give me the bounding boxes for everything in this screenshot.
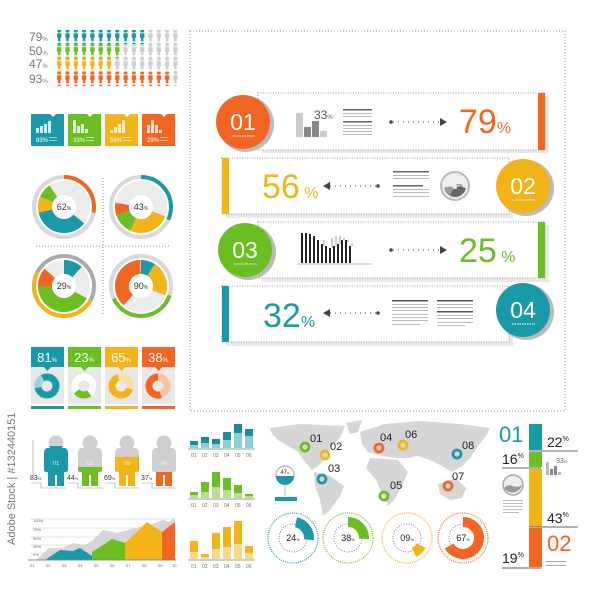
bar chart green: 05 (235, 503, 241, 509)
bar chart yellow: 03 (213, 564, 219, 570)
bar chart green: 03 (213, 503, 219, 509)
world map: 01 (310, 433, 322, 445)
area chart: 09 (158, 563, 163, 568)
figures chart: 69% (104, 475, 116, 482)
figures chart (30, 436, 177, 488)
donut chart 90% (111, 256, 171, 316)
right column stacked bar: 01 (499, 422, 523, 447)
world map (270, 420, 490, 516)
bar chart teal: 03 (213, 453, 219, 459)
area chart (28, 518, 177, 568)
bar chart yellow: 04 (224, 564, 230, 570)
bar chart green: 01 (191, 503, 197, 509)
bar chart teal: 05 (235, 453, 241, 459)
donut chart 29%: 29% (57, 281, 72, 291)
world map: 05 (390, 480, 402, 492)
banner 01: 33% (314, 108, 333, 122)
percentage cards: 81% (37, 350, 58, 365)
bar chart teal (188, 424, 255, 459)
figures chart: 04 (161, 461, 168, 467)
area chart: 0% (33, 552, 39, 557)
right column stacked bar: 33% (556, 458, 568, 465)
donut chart 62% (34, 177, 94, 237)
banner 03: 25 % (459, 232, 516, 270)
people percentage rows: 47% (29, 57, 48, 71)
bar chart teal: 02 (202, 453, 208, 459)
bar chart green: 04 (224, 503, 230, 509)
watermark text: Adobe Stock | #132440151 (6, 412, 18, 545)
figures chart: 44% (67, 475, 79, 482)
bar chart green: 02 (202, 503, 208, 509)
area chart: 02 (46, 563, 51, 568)
right column stacked bar: 19 (502, 550, 518, 566)
right column stacked bar: 22 (547, 434, 563, 450)
banner 01: 79% (459, 103, 511, 141)
figures chart: 83% (30, 475, 42, 482)
world map: 08 (462, 440, 474, 452)
banner 04: 04 (510, 297, 536, 323)
world map: 02 (330, 441, 342, 453)
people percentage rows: 79% (29, 30, 48, 44)
right column stacked bar: 16 (502, 451, 518, 467)
world map: 06 (405, 429, 417, 441)
bar chart yellow (188, 521, 255, 570)
right column stacked bar: % (518, 453, 524, 460)
ring donuts row: 67% (456, 533, 470, 543)
banner 02: 7% (456, 184, 464, 190)
area chart: 100% (33, 518, 44, 523)
right column stacked bar: 02 (547, 531, 571, 556)
bar chart green: 06 (246, 503, 252, 509)
area chart: 50% (33, 536, 41, 541)
right column stacked bar: % (563, 512, 569, 519)
banner 02: 56 % (262, 168, 318, 206)
mini bar boxes: 33% (73, 138, 86, 144)
percentage cards (31, 347, 175, 409)
right column stacked bar: % (518, 552, 524, 559)
mini bar boxes: 56% (110, 138, 123, 144)
world map: 07 (452, 471, 464, 483)
bar chart yellow: 01 (191, 564, 197, 570)
percentage cards: 65% (111, 350, 132, 365)
area chart: 10 (172, 563, 177, 568)
banner 04 (222, 283, 554, 346)
banner 01: 01 (230, 109, 256, 135)
right column stacked bar: 43 (547, 510, 563, 526)
world map: 04 (380, 432, 392, 444)
banner 01 (216, 93, 549, 153)
bar chart yellow: 06 (246, 564, 252, 570)
figures chart: 02 (87, 461, 94, 467)
world map: 03 (328, 463, 340, 475)
ring donuts row (268, 513, 488, 563)
area chart: 01 (30, 563, 35, 568)
bar chart green (188, 472, 255, 509)
donut chart 90%: 90% (134, 281, 149, 291)
area chart: 04 (78, 563, 83, 568)
mini bar boxes (31, 114, 175, 146)
bar chart teal: 06 (246, 453, 252, 459)
ring donuts row: 09% (400, 533, 414, 543)
people percentage rows: 93% (29, 72, 48, 86)
area chart: 06 (110, 563, 115, 568)
mini bar boxes: 29% (147, 138, 160, 144)
ring donuts row: 24% (286, 533, 300, 543)
bar chart teal: 01 (191, 453, 197, 459)
donut chart 43%: 43% (134, 202, 149, 212)
bar chart teal: 04 (224, 453, 230, 459)
banner 03 (218, 222, 549, 282)
area chart: 05 (94, 563, 99, 568)
area chart: 08 (142, 563, 147, 568)
banner 02: 02 (510, 173, 536, 199)
dotted frame (190, 31, 565, 411)
area chart: 25% (33, 544, 41, 549)
banner 04: 32% (263, 297, 315, 335)
figures chart: 03 (124, 461, 131, 467)
percentage cards: 23% (74, 350, 95, 365)
right column stacked bar (499, 422, 578, 568)
people percentage rows: 50% (29, 44, 48, 58)
banner 02 (222, 158, 554, 218)
world map: 47% (280, 470, 290, 476)
donut chart 62%: 62% (57, 202, 72, 212)
bar chart yellow: 02 (202, 564, 208, 570)
area chart: 07 (126, 563, 131, 568)
people percentage rows (29, 30, 181, 86)
mini bar boxes: 83% (36, 138, 49, 144)
area chart: 03 (62, 563, 67, 568)
area chart: 75% (33, 527, 41, 532)
right column stacked bar: % (563, 436, 569, 443)
ring donuts row: 38% (341, 533, 355, 543)
bar chart yellow: 05 (235, 564, 241, 570)
banner 03: 03 (232, 237, 258, 263)
percentage cards: 38% (148, 350, 169, 365)
donut chart 43% (111, 177, 171, 237)
figures chart: 37% (141, 475, 153, 482)
figures chart: 01 (53, 461, 60, 467)
donut chart 29% (34, 256, 94, 316)
donut cross lines (36, 178, 170, 314)
